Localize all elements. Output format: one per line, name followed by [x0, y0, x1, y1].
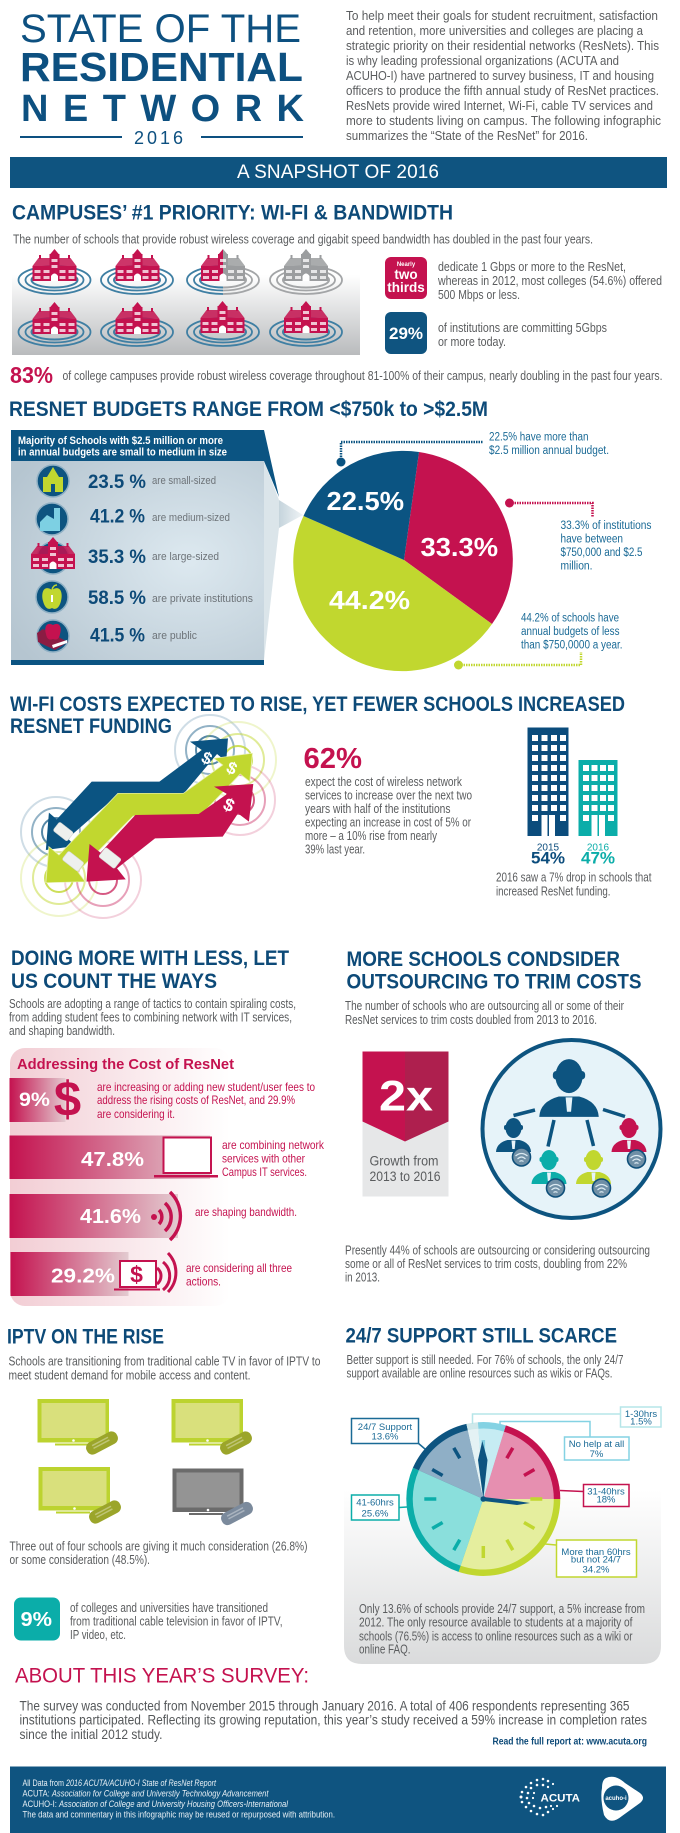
- stat: 62%: services to increase over the next two: [305, 788, 472, 802]
- link: read the full report: Read the full report at: www.acuta.org: [492, 1736, 647, 1748]
- arrows graphic: rising costs: $: [220, 794, 238, 816]
- callout: 1-30hrs 1.5%: 1-30hrs: [625, 1409, 657, 1420]
- title: RESIDENTIAL: [20, 44, 303, 90]
- text: iptv intro: [8, 1354, 321, 1382]
- text: outsourcing intro: ResNet services to trim costs doubled from 2013 to 2016.: [345, 1013, 597, 1027]
- text: funding drop: [496, 870, 652, 898]
- text: survey description: since the initial 2012 study.: [20, 1726, 162, 1742]
- heading: outsourcing: [346, 948, 642, 994]
- stat: small-sized: 23.5 %: [88, 472, 146, 493]
- chart: building 2015 54%: [528, 728, 568, 868]
- row: all three actions: [10, 1252, 292, 1296]
- icon: apple: [36, 581, 68, 613]
- callout: 33.3%: million.: [560, 560, 592, 572]
- pie chart: budgets: [293, 451, 513, 671]
- stat: 83%: 83%: [10, 362, 53, 388]
- callout: 1-30hrs 1.5%: [472, 1407, 661, 1428]
- intro text: [346, 9, 661, 143]
- text: support intro: [346, 1353, 624, 1380]
- intro text: ResNets provide wired Internet, Wi-Fi, cable TV services and: [346, 99, 653, 113]
- callout: 9% iptv: IP video, etc.: [70, 1628, 126, 1642]
- callout: more than 60hrs 34.2%: More than 60hrs: [561, 1547, 631, 1558]
- text: iptv consideration: [10, 1540, 308, 1567]
- text: two thirds detail: [437, 260, 662, 302]
- row: student fees: are considering it.: [97, 1107, 175, 1121]
- stat: 62%: more – a 10% rise from nearly: [305, 829, 438, 843]
- row: student fees: 9%: [19, 1090, 50, 1111]
- pie chart: budgets: 44.2%: [329, 585, 410, 615]
- callout: 44.2%: annual budgets of less: [521, 626, 620, 638]
- callout: 24/7 support 13.6%: [352, 1418, 425, 1449]
- chart: clock pie of support hours: [406, 1422, 560, 1576]
- row: student fees: address the rising costs of ResNet, and 29.9%: [97, 1093, 295, 1107]
- footer credits: ACUTA: Association for College and Universtiy Technology Advancement: [22, 1788, 269, 1798]
- campus icon grid: [12, 249, 360, 355]
- stat: medium-sized: 41.2 %: [90, 506, 145, 528]
- callout: 41-60hrs 25.6%: 41-60hrs: [356, 1498, 394, 1508]
- callout: 33.3%: [505, 498, 652, 572]
- row: combining services: Campus IT services.: [222, 1165, 307, 1179]
- heading: iptv: IPTV ON THE RISE: [7, 1326, 164, 1348]
- banner: a snapshot of 2016: A SNAPSHOT OF 2016: [237, 162, 439, 183]
- row: student fees: are increasing or adding new student/user fees to: [97, 1080, 315, 1094]
- row: shaping bandwidth: are shaping bandwidth.: [195, 1205, 297, 1219]
- row: all three actions: 29.2%: [51, 1266, 115, 1288]
- row: combining services: 47.8%: [81, 1149, 144, 1171]
- text: two thirds detail: dedicate 1 Gbps or more to the ResNet,: [438, 260, 626, 274]
- stat: public: [90, 626, 197, 646]
- callout: 22.5%: [336, 432, 609, 466]
- text: two thirds detail: 500 Mbps or less.: [438, 288, 520, 302]
- chart: building 2015 54%: 2015: [537, 842, 560, 854]
- callout: 2x growth: [362, 1052, 448, 1196]
- text: iptv consideration: or some consideration (48.5%).: [10, 1553, 150, 1567]
- heading: doing more with less: DOING MORE WITH LESS, LET: [11, 947, 289, 970]
- text: iptv intro: meet student demand for mobile access and content.: [8, 1368, 250, 1382]
- pie chart: budgets: 22.5%: [326, 486, 404, 516]
- callout: 44.2%: 44.2% of schools have: [521, 612, 619, 624]
- footer credits: The data and commentary in this infographic may be reused or repurposed with attribution.: [22, 1810, 335, 1820]
- text: survey description: [20, 1698, 647, 1742]
- heading: about this year's survey: ABOUT THIS YEAR’S SURVEY:: [15, 1664, 309, 1688]
- callout: more than 60hrs 34.2%: but not 24/7: [571, 1554, 621, 1566]
- row: all three actions: actions.: [186, 1274, 221, 1288]
- row: student fees: $: [54, 1073, 81, 1127]
- panel: school size breakdown: Majority of Schools with $2.5 million or more: [18, 435, 223, 447]
- callout: 31-40hrs 18%: [560, 1484, 629, 1506]
- text: outsourcing intro: [345, 999, 624, 1027]
- callout: 24/7 support 13.6%: 24/7 Support: [358, 1422, 413, 1433]
- callout: 33.3%: 33.3% of institutions: [560, 520, 652, 532]
- heading: wi-fi costs: [10, 693, 625, 738]
- callout: 9% iptv: [14, 1598, 282, 1642]
- row: all three actions: are considering all three: [186, 1261, 292, 1275]
- icon: four televisions: [38, 1399, 255, 1527]
- stat: medium-sized: are medium-sized: [152, 512, 230, 524]
- callout: 9% iptv: of colleges and universities have transitioned: [70, 1601, 268, 1615]
- panel: school size breakdown: in annual budgets are small to medium in size: [18, 446, 227, 458]
- stat: large-sized: [88, 547, 219, 568]
- callout: nearly two thirds: Nearly: [397, 262, 416, 268]
- text: tactics: Schools are adopting a range of tactics to contain spiraling costs,: [9, 997, 296, 1011]
- heading: budgets: RESNET BUDGETS RANGE FROM <$750k to >$2.5M: [9, 398, 488, 421]
- row: shaping bandwidth: 41.6%: [80, 1206, 141, 1228]
- stat: 83%: [10, 362, 662, 388]
- text: outsourcing detail: [345, 1244, 650, 1284]
- text: 29% detail: or more today.: [438, 335, 506, 349]
- footer credits: ACUHO-I: Association of College and University Housing Officers-International: [22, 1799, 289, 1809]
- heading: outsourcing: MORE SCHOOLS CONDSIDER: [346, 948, 620, 971]
- callout: 31-40hrs 18%: 31-40hrs: [587, 1486, 625, 1498]
- icon: small school: [37, 465, 69, 497]
- chart: building 2015 54%: 54%: [531, 848, 565, 868]
- callout: 9% iptv: from traditional cable television in favor of IPTV,: [70, 1614, 282, 1628]
- callout: 2x growth: 2x: [379, 1072, 433, 1120]
- text: outsourcing detail: in 2013.: [345, 1270, 380, 1284]
- intro text: ACUHO-I) have partnered to survey business, IT and housing: [346, 69, 654, 83]
- text: tactics: from adding student fees to combining network with IT services,: [9, 1010, 292, 1024]
- text: support detail: online FAQ.: [359, 1642, 410, 1656]
- callout: more than 60hrs 34.2%: 34.2%: [583, 1564, 610, 1576]
- callout: 2x growth: Growth from: [370, 1154, 438, 1168]
- text: support detail: [359, 1602, 645, 1656]
- intro text: is why leading professional organizations (ACUTA and: [346, 54, 619, 68]
- chart: building 2016 47%: 2016: [587, 842, 610, 854]
- callout: 41-60hrs 25.6%: [352, 1495, 407, 1520]
- text: iptv consideration: Three out of four schools are giving it much consideration (26.8%): [10, 1540, 308, 1554]
- stat: 62%: 62%: [304, 743, 362, 775]
- panel: addressing the cost of resnet: [10, 1048, 325, 1306]
- stat: public: 41.5 %: [90, 626, 145, 646]
- callout: no help at all 7%: 7%: [590, 1449, 604, 1460]
- stat: 62%: expect the cost of wireless network: [305, 775, 463, 789]
- text: support intro: support available are online resources such as wikis or FAQs.: [346, 1366, 612, 1380]
- intro text: summarizes the “State of the ResNet” for 2016.: [346, 129, 588, 143]
- banner: a snapshot of 2016: [10, 157, 667, 188]
- callout: no help at all 7%: [500, 1422, 629, 1460]
- intro text: officers to produce the fifth annual study of ResNet practices.: [346, 84, 659, 98]
- text: tactics: [9, 997, 296, 1038]
- callout: 33.3%: have between: [560, 534, 623, 546]
- heading: outsourcing: OUTSOURCING TO TRIM COSTS: [346, 970, 642, 994]
- heading: wi-fi costs: RESNET FUNDING: [10, 715, 172, 738]
- intro text: strategic priority on their residential networks (ResNets). This: [346, 39, 659, 53]
- row: combining services: [10, 1136, 325, 1179]
- stat: private institutions: [88, 588, 253, 609]
- title: [20, 7, 305, 148]
- callout: no help at all 7%: No help at all: [569, 1439, 624, 1450]
- panel: school size breakdown: [11, 430, 303, 665]
- row: student fees: [10, 1073, 315, 1127]
- callout: 24/7 support 13.6%: 13.6%: [372, 1432, 399, 1442]
- arrows graphic: rising costs: $: [198, 748, 216, 769]
- heading: 24/7 support: 24/7 SUPPORT STILL SCARCE: [346, 1324, 617, 1348]
- intro text: To help meet their goals for student recruitment, satisfaction: [346, 9, 658, 23]
- chart: building 2016 47%: [578, 760, 618, 868]
- callout: 9% iptv: 9%: [20, 1609, 52, 1631]
- footer credits: All Data from 2016 ACUTA/ACUHO-I State of ResNet Report: [22, 1778, 216, 1788]
- row: combining services: services with other: [222, 1152, 305, 1166]
- logo: acuta: [520, 1778, 580, 1816]
- text: 29% detail: [438, 321, 607, 349]
- stat: public: are public: [152, 630, 197, 642]
- stat: 62%: 39% last year.: [305, 842, 365, 856]
- panel: support background: [344, 1490, 661, 1664]
- stat: 62%: expecting an increase in cost of 5% or: [305, 816, 471, 830]
- pie chart: budgets: 33.3%: [420, 532, 498, 562]
- icon: outsourcing org chart: [482, 1040, 660, 1218]
- stat: private institutions: 58.5 %: [88, 588, 146, 609]
- text: iptv intro: Schools are transitioning from traditional cable TV in favor of IPTV to: [8, 1354, 321, 1368]
- stat: small-sized: [88, 472, 216, 493]
- panel: addressing the cost of resnet: Addressing the Cost of ResNet: [17, 1056, 234, 1073]
- callout: 1-30hrs 1.5%: 1.5%: [630, 1416, 652, 1428]
- text: tactics: and shaping bandwidth.: [9, 1024, 115, 1038]
- stat: 62%: years with half of the institutions: [305, 802, 450, 816]
- callout: 29%: 29%: [389, 324, 423, 343]
- intro text: and retention, more universities and colleges are placing a: [346, 24, 643, 38]
- callout: more than 60hrs 34.2%: [545, 1540, 636, 1577]
- callout: nearly two thirds: two: [394, 267, 418, 282]
- title: STATE OF THE: [20, 7, 301, 51]
- logo: acuta: ACUTA: [540, 1792, 580, 1804]
- row: combining services: are combining network: [222, 1138, 325, 1152]
- callout: 41-60hrs 25.6%: 25.6%: [362, 1508, 389, 1520]
- arrows graphic: rising costs: $: [223, 758, 241, 779]
- callout: 22.5%: 22.5% have more than: [489, 432, 588, 444]
- icon: book and apple: [37, 620, 69, 652]
- callout: 44.2%: than $750,0000 a year.: [521, 640, 622, 652]
- callout: 33.3%: $750,000 and $2.5: [560, 547, 642, 559]
- arrows graphic: rising costs: [21, 715, 276, 918]
- heading: doing more with less: US COUNT THE WAYS: [11, 970, 217, 993]
- stat: large-sized: are large-sized: [152, 551, 219, 563]
- footer: [10, 1766, 666, 1833]
- callout: nearly two thirds: [385, 257, 427, 299]
- stat: large-sized: 35.3 %: [88, 547, 146, 568]
- title: 2016: [134, 128, 183, 148]
- text: 29% detail: of institutions are committing 5Gbps: [438, 321, 607, 335]
- stat: small-sized: are small-sized: [152, 475, 216, 487]
- chart: building 2016 47%: 47%: [581, 848, 615, 868]
- callout: 22.5%: $2.5 million annual budget.: [489, 445, 609, 457]
- heading: wi-fi priority: CAMPUSES’ #1 PRIORITY: WI-FI & BANDWIDTH: [12, 202, 453, 224]
- logo: acuho-i: [601, 1777, 643, 1821]
- text: funding drop: increased ResNet funding.: [496, 884, 610, 898]
- heading: doing more with less: [11, 947, 289, 993]
- row: all three actions: $: [130, 1262, 143, 1288]
- stat: 62%: [304, 743, 472, 856]
- icon: large school: [31, 537, 75, 574]
- row: shaping bandwidth: [10, 1192, 297, 1240]
- callout: 31-40hrs 18%: 18%: [596, 1494, 616, 1506]
- title: NETWORK: [21, 88, 305, 130]
- callout: 29%: [385, 312, 427, 354]
- icon: medium school: [36, 503, 68, 535]
- stat: private institutions: are private institutions: [152, 593, 253, 605]
- logo: acuho-i: acuho-i: [605, 1796, 627, 1802]
- callout: nearly two thirds: thirds: [387, 280, 425, 295]
- intro text: more to students living on campus. The following infographic: [346, 114, 661, 128]
- stat: medium-sized: [90, 506, 230, 528]
- callout: 2x growth: 2013 to 2016: [370, 1169, 440, 1184]
- callout: 44.2%: [454, 612, 622, 670]
- footer credits: [22, 1778, 335, 1820]
